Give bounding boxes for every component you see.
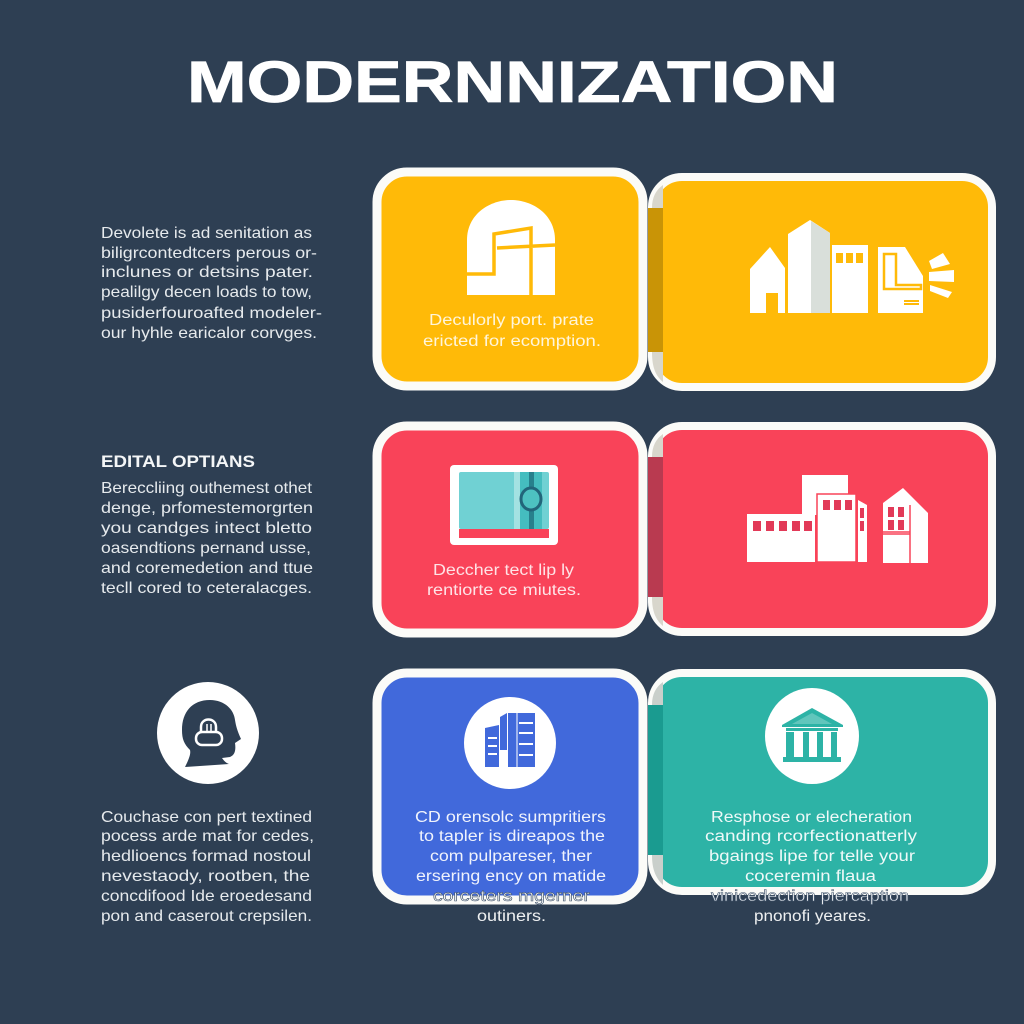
card text: blue card: corceters mgerner xyxy=(433,888,590,905)
text block: head paragraph: nevestaody, rootben, the xyxy=(101,868,310,885)
card text: blue card xyxy=(415,809,606,925)
text block: edital options paragraph: tecll cored to ceteralacges. xyxy=(101,580,312,597)
card text: teal card: coceremin flaua xyxy=(745,868,876,885)
card text: teal card: pnonofi yeares. xyxy=(754,908,871,925)
text block: edital options paragraph: you candges intect bletto xyxy=(101,520,312,537)
card text: teal card: vinicedection piercaption xyxy=(711,888,909,905)
icon: arch building xyxy=(467,200,555,295)
text block: head paragraph: pon and caserout crepsilen. xyxy=(101,908,312,925)
card caption: ericted for ecomption. xyxy=(423,333,601,350)
card text: teal card: canding rcorfectionatterly xyxy=(705,828,917,845)
text block: head paragraph: pocess arde mat for cedes, xyxy=(101,828,314,845)
text block: head paragraph: hedlioencs formad nostoul xyxy=(101,848,311,865)
card text: blue card: com pulpareser, ther xyxy=(430,848,592,865)
panel: red right card xyxy=(648,426,992,632)
text block: intro paragraph xyxy=(101,225,322,342)
card text: blue card: CD orensolc sumpritiers xyxy=(415,809,606,826)
text block: edital options paragraph: and coremedetion and ttue xyxy=(101,560,313,577)
card caption: Deccher tect lip ly xyxy=(433,562,574,579)
text block: intro paragraph: Devolete is ad senitation as xyxy=(101,225,312,242)
icon: temple xyxy=(765,688,859,784)
icon: office towers xyxy=(464,697,556,789)
text block: head paragraph: concdifood Ide eroedesand xyxy=(101,888,312,905)
panel: blue left card xyxy=(377,673,643,900)
icon: red city buildings xyxy=(747,475,928,563)
card caption: rentiorte ce miutes. xyxy=(427,582,581,599)
title: MODERNNIZATION xyxy=(187,50,838,115)
panel: red left card xyxy=(377,426,643,633)
panel: yellow left card xyxy=(377,172,643,386)
text block: edital options paragraph: denge, prfomestemorgrten xyxy=(101,500,313,517)
icon: tablet xyxy=(450,465,558,545)
heading: edital options: EDITAL OPTIANS xyxy=(101,453,255,471)
card caption xyxy=(423,312,601,350)
card text: blue card: to tapler is direapos the xyxy=(419,828,605,845)
card text: teal card: bgaings lipe for telle your xyxy=(709,848,915,865)
card text: blue card: outiners. xyxy=(477,908,546,925)
icon: city buildings with document xyxy=(750,220,954,313)
text block: intro paragraph: biligrcontedtcers perous or- xyxy=(101,245,317,262)
text block: intro paragraph: our hyhle earicalor corvges. xyxy=(101,325,317,342)
text block: intro paragraph: pealilgy decen loads to tow, xyxy=(101,284,312,301)
panel: teal right card xyxy=(648,673,992,891)
text block: intro paragraph: inclunes or detsins pater. xyxy=(101,264,313,281)
text block: head paragraph xyxy=(101,809,314,925)
card text: teal card xyxy=(705,809,917,925)
card caption: Deculorly port. prate xyxy=(429,312,594,329)
text block: edital options paragraph: Bereccliing outhemest othet xyxy=(101,480,313,497)
text block: edital options paragraph: oasendtions pernand usse, xyxy=(101,540,311,557)
card caption xyxy=(427,562,581,599)
icon: head with lock xyxy=(157,682,259,784)
card text: blue card: ersering ency on matide xyxy=(416,868,606,885)
text block: intro paragraph: pusiderfouroafted modeler- xyxy=(101,305,322,322)
panel: yellow right card xyxy=(648,177,992,387)
text block: edital options paragraph xyxy=(101,480,313,597)
card text: teal card: Resphose or elecheration xyxy=(711,809,912,826)
text block: head paragraph: Couchase con pert textined xyxy=(101,809,312,826)
